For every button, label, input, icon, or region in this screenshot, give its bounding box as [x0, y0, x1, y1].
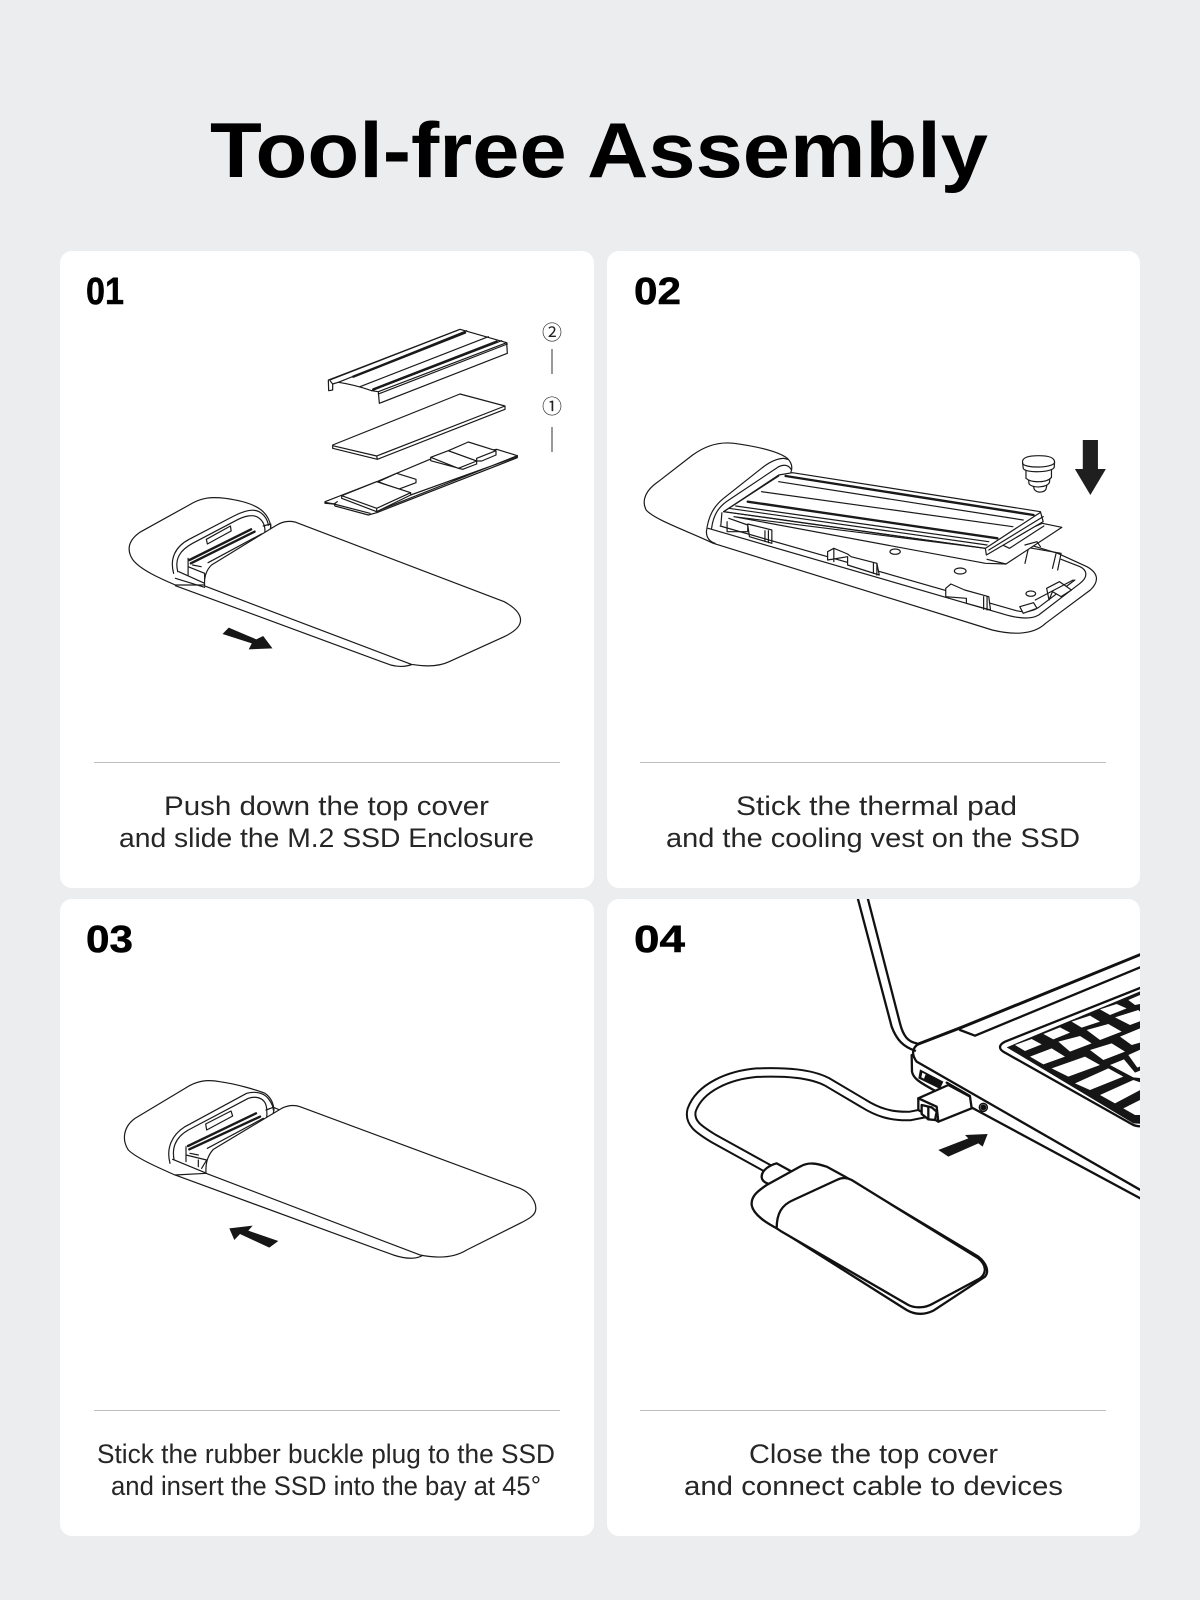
external enclosure: [752, 1163, 987, 1314]
panel: step 02: [607, 251, 1140, 888]
SSD underside: [734, 517, 1062, 564]
step number 04: 04: [634, 919, 685, 961]
caption 04: and connect cable to devices: [684, 1471, 1063, 1501]
rubber buckle plug: [1023, 456, 1055, 492]
enclosure body: [644, 443, 1096, 633]
heatsink cooling vest: [328, 329, 507, 403]
mid board and clips: [721, 513, 1073, 613]
enclosure opening and connector: [172, 510, 271, 587]
caption 02: [666, 791, 1080, 853]
cable: [691, 1072, 927, 1173]
panel: step 03: [60, 899, 594, 1536]
heatsink: [724, 473, 1043, 555]
panel: step 01: [60, 251, 594, 888]
exploded parts: heatsink, thermal pad, SSD: [325, 329, 517, 515]
enclosure sleeve cap: [124, 1081, 274, 1175]
arrow: slide down: [223, 628, 272, 649]
laptop lid and base: [857, 897, 1143, 1200]
step number 03: 03: [86, 919, 133, 961]
sliding top cover: [206, 1106, 536, 1257]
label: part 2 marker: ②: [542, 316, 562, 346]
illustration: enclosure with top cover: [129, 498, 521, 666]
enclosure opening and connector: [169, 1092, 280, 1173]
base lower edge: [175, 1175, 423, 1258]
thermal pad: [333, 394, 505, 459]
panel 04 background: [607, 899, 1140, 1536]
label: part 1 marker: [542, 390, 562, 452]
panel 01 background: [60, 251, 594, 888]
title: Tool-free Assembly: [210, 106, 988, 194]
enclosure sleeve cap: [129, 498, 271, 585]
arrow: insert left: [229, 1226, 278, 1248]
USB plug: [918, 1085, 972, 1122]
caption 01: Push down the top cover: [164, 791, 489, 821]
caption 01: and slide the M.2 SSD Enclosure: [119, 823, 534, 853]
caption 03: [97, 1439, 555, 1501]
caption 03: and insert the SSD into the bay at 45°: [111, 1471, 541, 1501]
caption 04: Close the top cover: [749, 1439, 998, 1469]
panel 02 background: [607, 251, 1140, 888]
arrow: down: [1075, 440, 1106, 495]
keyboard: [1000, 987, 1143, 1126]
caption 03: Stick the rubber buckle plug to the SSD: [97, 1439, 555, 1469]
headphone jack: [979, 1103, 987, 1111]
caption 04: [684, 1439, 1063, 1501]
panel: step 04: [607, 897, 1143, 1536]
arrow: plug in: [938, 1134, 988, 1157]
panel 03 background: [60, 899, 594, 1536]
label: part 1 marker: ①: [542, 390, 562, 420]
step number 01: 01: [86, 271, 124, 313]
illustration: open enclosure with SSD and heatsink: [644, 440, 1106, 633]
caption 02: and the cooling vest on the SSD: [666, 823, 1080, 853]
sliding top cover: [205, 521, 521, 666]
caption 02: Stick the thermal pad: [736, 791, 1017, 821]
USB port: [918, 1069, 943, 1089]
illustration: laptop, cable and enclosure: [691, 897, 1143, 1314]
step number 02: 02: [634, 271, 681, 313]
caption 01: [119, 791, 534, 853]
base lower edge: [175, 586, 415, 666]
label: part 2 marker: [542, 316, 562, 374]
enclosure inner rim: [706, 458, 1086, 618]
SSD board with chips: [325, 442, 517, 515]
illustration: closing the enclosure: [124, 1081, 536, 1258]
